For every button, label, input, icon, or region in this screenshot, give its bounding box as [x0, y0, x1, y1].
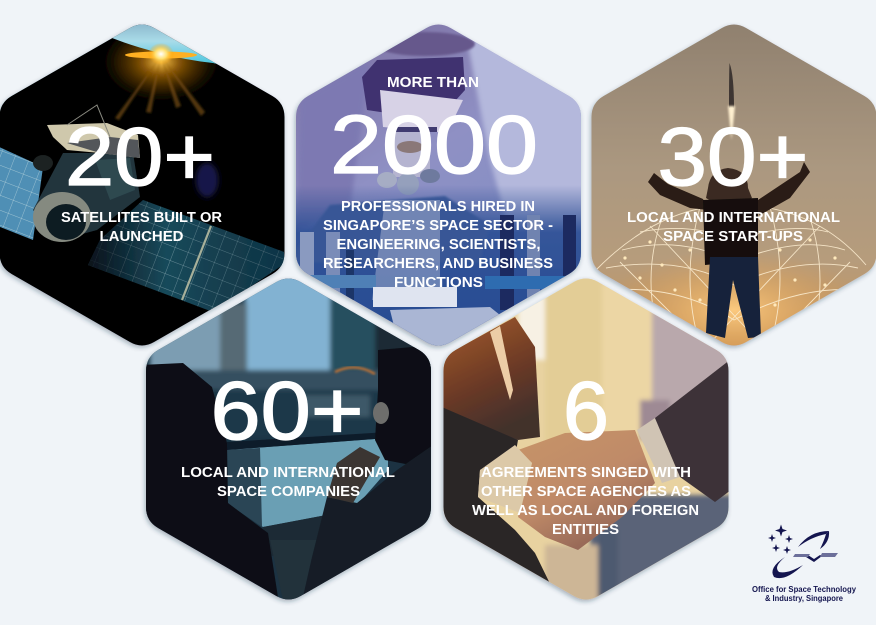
photo: microscope in lab — [290, 15, 590, 355]
photo: handshake — [435, 270, 740, 615]
caption: satellites built or launched: SATELLITES BUILT OR — [61, 210, 223, 226]
panel: companies — [140, 270, 440, 610]
icon: stars and satellite orbit — [768, 524, 829, 578]
caption: professionals hired — [323, 199, 553, 291]
caption: professionals hired: PROFESSIONALS HIRED IN — [341, 199, 535, 215]
number: 60+: 60+ — [210, 364, 364, 457]
caption: agreements signed — [472, 465, 699, 538]
panel: satellites — [0, 15, 290, 355]
number: 20+: 20+ — [65, 110, 215, 203]
caption: local and international start-ups: LOCAL AND INTERNATIONAL — [627, 210, 840, 226]
caption: agreements signed: WELL AS LOCAL AND FOREIGN — [472, 503, 699, 519]
caption: agreements signed: ENTITIES — [552, 522, 619, 538]
caption: professionals hired: FUNCTIONS — [394, 275, 483, 291]
caption: local and international companies: SPACE COMPANIES — [217, 484, 360, 500]
caption: agreements signed: OTHER SPACE AGENCIES AS — [481, 484, 691, 500]
logo text: Office for Space Technology — [752, 585, 856, 594]
caption: professionals hired: ENGINEERING, SCIENTISTS, — [336, 237, 540, 253]
caption: local and international companies: LOCAL AND INTERNATIONAL — [181, 465, 395, 481]
panel: professionals — [290, 15, 590, 355]
caption: agreements signed: AGREEMENTS SINGED WITH — [481, 465, 691, 481]
caption: professionals hired: SINGAPORE’S SPACE SECTOR - — [323, 218, 553, 234]
caption: professionals hired: RESEARCHERS, AND BUSINESS — [323, 256, 553, 272]
number: 6: 6 — [563, 364, 609, 457]
photo: person watching rocket launch — [585, 15, 876, 372]
number: 30+: 30+ — [658, 110, 808, 203]
caption: satellites built or launched: LAUNCHED — [100, 229, 184, 245]
logo text: & Industry, Singapore — [765, 594, 843, 603]
caption: local and international start-ups: SPACE START-UPS — [663, 229, 803, 245]
caption: local and international companies — [181, 465, 395, 500]
logo text — [752, 585, 856, 603]
caption: local and international start-ups — [627, 210, 840, 245]
panel: start-ups — [585, 15, 876, 372]
number: 2000: 2000 — [330, 98, 538, 191]
icon: solar panels — [793, 553, 838, 557]
photo: satellite in orbit — [0, 15, 290, 355]
panel: agreements — [435, 270, 740, 615]
logo: Office for Space Technology and Industry — [752, 524, 856, 603]
photo: mission control operators — [140, 270, 440, 610]
label: more than: MORE THAN — [387, 75, 479, 91]
caption: satellites built or launched — [61, 210, 223, 245]
